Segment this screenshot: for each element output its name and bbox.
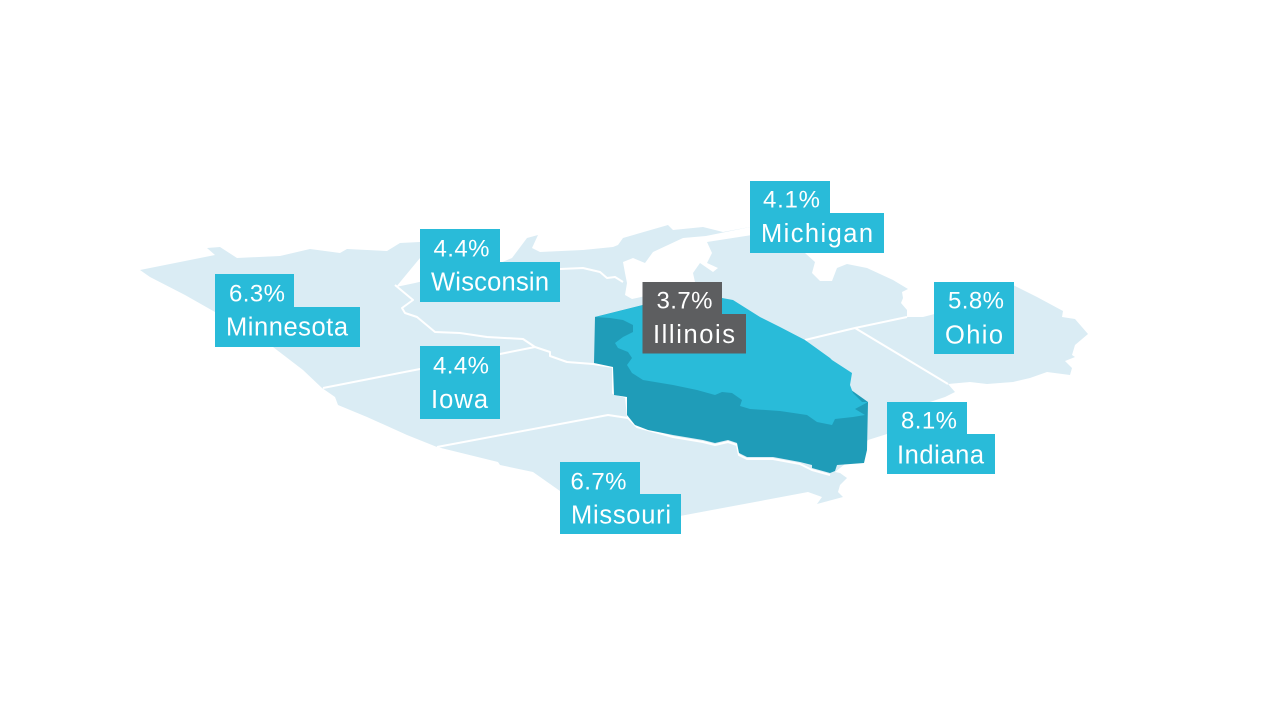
Illinois top face: [595, 295, 868, 425]
Illinois side face: [594, 298, 868, 473]
label: Wisconsin: 4.4%: [434, 236, 490, 262]
label: Illinois: [642, 282, 746, 354]
map: Illinois 3D extruded state: [594, 295, 868, 473]
label: Iowa: Iowa: [431, 386, 489, 414]
label: Indiana: 8.1%: [901, 408, 957, 434]
label: Illinois: Illinois: [653, 321, 735, 349]
label: Michigan: Michigan: [761, 220, 873, 248]
label: Minnesota: Minnesota: [226, 314, 349, 342]
label: Wisconsin: [420, 229, 560, 302]
label: Indiana: Indiana: [897, 442, 985, 470]
label: Missouri: 6.7%: [570, 468, 626, 496]
label: Wisconsin: Wisconsin: [431, 268, 549, 296]
label: Illinois: 3.7%: [656, 288, 712, 314]
state borders: [323, 268, 948, 475]
label: Ohio: [934, 282, 1014, 354]
label: Minnesota: 6.3%: [229, 280, 285, 308]
label: Missouri: [560, 462, 681, 534]
map: neighbouring Midwest states: [140, 225, 1088, 525]
label: Missouri: Missouri: [571, 502, 671, 530]
Great Lakes cut-out: [623, 226, 755, 299]
label: Ohio: 5.8%: [948, 288, 1004, 314]
label: Iowa: 4.4%: [433, 352, 489, 380]
label: Iowa: [420, 346, 500, 419]
label: Ohio: Ohio: [945, 322, 1003, 350]
label: Michigan: [750, 181, 884, 253]
label: Michigan: 4.1%: [763, 186, 820, 214]
label: Indiana: [887, 402, 995, 474]
label: Minnesota: [215, 274, 360, 347]
